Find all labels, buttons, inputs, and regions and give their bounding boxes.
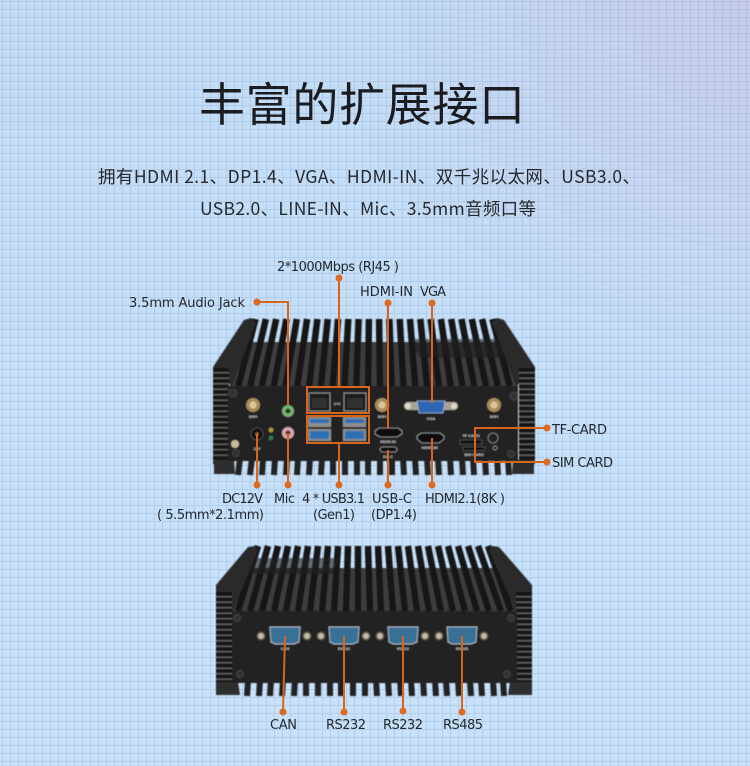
port labels: SIM CARD	[552, 456, 613, 471]
HDMI and USB-C ports: DP-C	[383, 454, 393, 459]
port labels: DC12V	[222, 492, 263, 507]
RJ45 ports: 1+2	[334, 401, 341, 406]
VGA port	[404, 401, 458, 421]
port labels: ( 5.5mm*2.1mm)	[157, 508, 264, 523]
power terminal and DC jack: 12V	[253, 446, 261, 451]
port labels	[270, 718, 483, 733]
port labels: (Gen1)	[313, 508, 355, 523]
port labels: (DP1.4)	[371, 508, 417, 523]
feet	[216, 682, 532, 695]
serial DB9 connectors: RS232	[397, 646, 410, 651]
port labels	[129, 260, 613, 523]
rear panel	[232, 611, 517, 683]
cooling fins top	[232, 546, 517, 611]
orange callout lines and dots	[280, 636, 466, 716]
WIFI antenna connectors: WIFI	[490, 414, 498, 419]
port labels: 4 * USB3.1	[302, 492, 365, 507]
USB ports	[308, 417, 366, 441]
power terminal and DC jack	[231, 428, 273, 451]
chassis hardware	[216, 546, 532, 696]
side fins	[213, 368, 535, 464]
panel screws	[234, 614, 514, 678]
port labels: VGA	[420, 285, 446, 300]
subtitle text block: USB2.0、LINE-IN、Mic、3.5mm音频口等	[200, 196, 536, 221]
panel screws	[229, 389, 518, 458]
port labels: Mic	[274, 492, 295, 507]
feet	[214, 460, 534, 474]
port labels: CAN	[270, 718, 297, 733]
TF and SIM slots, power button: SIM CARD	[464, 452, 484, 457]
HDMI and USB-C ports: HDMI-IN	[380, 439, 396, 444]
HDMI and USB-C ports	[375, 428, 444, 459]
device: front view with I/O ports	[129, 260, 613, 523]
chassis corners	[213, 318, 535, 386]
serial DB9 connectors: RS232	[338, 646, 351, 651]
front panel	[228, 386, 518, 461]
orange callout lines and dots	[254, 274, 550, 488]
port labels: HDMI2.1(8K )	[425, 492, 505, 507]
audio jacks	[282, 405, 294, 439]
subtitle text block	[98, 164, 640, 221]
WIFI antenna connectors: WIFI	[378, 414, 386, 419]
serial DB9 connectors: CAN	[281, 646, 289, 651]
TF and SIM slots, power button	[460, 433, 498, 457]
cooling fins top	[230, 319, 518, 386]
port labels: 2*1000Mbps (RJ45 )	[277, 260, 399, 275]
WIFI antenna connectors: WIFI	[249, 414, 257, 419]
VGA port: VGA	[427, 416, 435, 421]
chassis corners	[216, 546, 532, 611]
serial DB9 connectors: RS485	[456, 646, 469, 651]
HDMI and USB-C ports: HDMI-8K	[422, 445, 438, 450]
port labels: 3.5mm Audio Jack	[129, 296, 245, 311]
port labels: RS232	[326, 718, 366, 733]
port labels: HDMI-IN	[360, 285, 413, 300]
RJ45 ports	[309, 393, 366, 411]
port labels: USB-C	[372, 492, 412, 507]
device: rear view with serial ports	[216, 546, 532, 733]
port labels: RS232	[383, 718, 423, 733]
chassis hardware	[213, 318, 535, 475]
subtitle text block: 拥有HDMI 2.1、DP1.4、VGA、HDMI-IN、双千兆以太网、USB3.0、	[98, 164, 640, 189]
port labels: RS485	[443, 718, 483, 733]
bottom fins	[238, 458, 509, 475]
title: 丰富的扩展接口	[199, 69, 525, 135]
serial DB9 connectors	[258, 627, 488, 651]
port labels: TF-CARD	[551, 423, 607, 438]
side fins	[216, 592, 532, 684]
WIFI antenna connectors	[246, 398, 501, 419]
bottom fins	[247, 680, 504, 696]
TF and SIM slots, power button: TF CARD	[462, 433, 480, 438]
